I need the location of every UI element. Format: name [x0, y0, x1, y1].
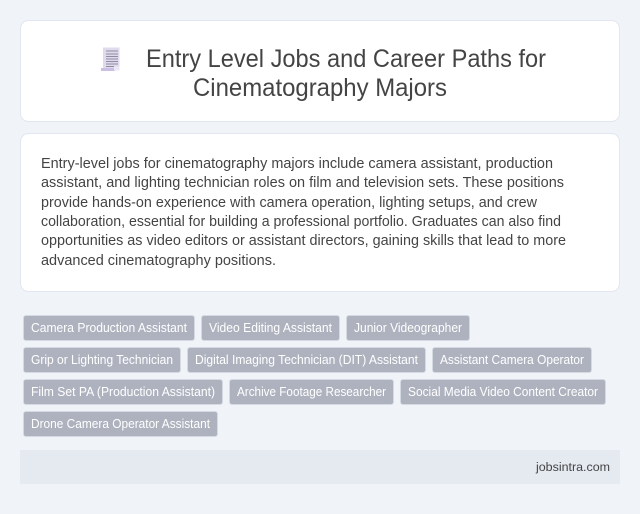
tag [24, 316, 194, 340]
tag [202, 316, 340, 340]
tag: Assistant Camera Operator [440, 352, 585, 367]
panel: description [20, 134, 620, 292]
tag: Digital Imaging Technician (DIT) Assistant [195, 352, 418, 367]
footer text: jobsintra.com [535, 460, 610, 474]
tag: Camera Production Assistant [31, 320, 187, 335]
text block: description: assistant, and lighting technician roles on film and television sets. These positions [41, 175, 564, 191]
tag [24, 380, 222, 404]
text block: description: Entry-level jobs for cinematography majors include camera assistant, production [41, 156, 553, 172]
title: Cinematography Majors [193, 74, 447, 102]
tag [400, 380, 606, 404]
tag: Archive Footage Researcher [237, 384, 387, 399]
text block: description: collaboration, essential for building a professional portfolio. Graduates can also find [41, 214, 561, 230]
tag [346, 316, 470, 340]
tag [24, 348, 180, 372]
text block: description: provide hands-on experience with camera operation, lighting setups, and crew [41, 195, 537, 211]
title: Entry Level Jobs and Career Paths for [146, 45, 546, 73]
tag: Video Editing Assistant [209, 320, 332, 335]
text block: description [41, 156, 566, 269]
tag: Film Set PA (Production Assistant) [31, 384, 215, 399]
tags: job titles [24, 316, 606, 436]
text block: description: advanced cinematography positions. [41, 253, 276, 269]
text block: description: opportunities as video editors or assistant directors, gaining skills that lead to more [41, 233, 566, 249]
tag: Social Media Video Content Creator [408, 384, 599, 399]
tag: Drone Camera Operator Assistant [31, 416, 210, 431]
tag [230, 380, 394, 404]
tag [24, 412, 218, 436]
tag [432, 348, 592, 372]
tag [188, 348, 426, 372]
title [146, 45, 546, 102]
panel: header [20, 20, 620, 122]
tag: Junior Videographer [354, 320, 463, 335]
tag: Grip or Lighting Technician [31, 352, 173, 367]
icon: document scroll [101, 48, 120, 71]
footer [20, 450, 620, 484]
